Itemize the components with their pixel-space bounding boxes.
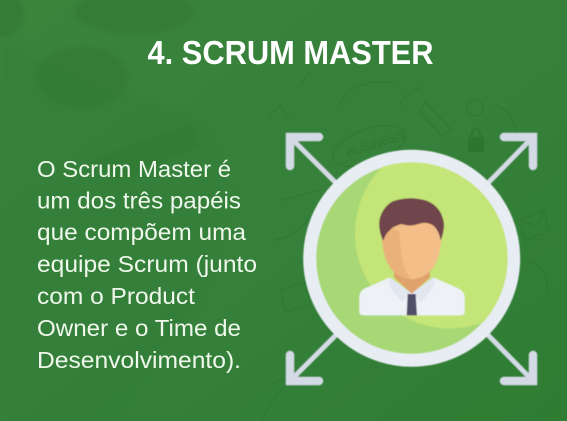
shirt [359, 277, 465, 315]
neck [394, 267, 430, 294]
arrow: top right [488, 137, 533, 183]
text block: Scrum Master description: Desenvolvimento). [37, 347, 241, 373]
text block: Scrum Master description: um dos três papéis [37, 188, 241, 214]
arrow: top left [290, 137, 336, 183]
text block: Scrum Master description: Owner e o Time de [37, 315, 241, 341]
icon: padlock doodle [468, 128, 484, 152]
tie [407, 294, 417, 315]
circle highlight [354, 162, 508, 328]
background: faded business doodles: BUSINESS [345, 128, 407, 160]
icon: four outward arrows [290, 137, 533, 381]
title: 4. SCRUM MASTER [148, 34, 434, 71]
text block: Scrum Master description: equipe Scrum (junto [37, 251, 257, 277]
person [359, 198, 465, 315]
text block: Scrum Master description: O Scrum Master é [37, 156, 231, 182]
face shade [382, 227, 412, 279]
background: faded business doodles [262, 72, 548, 420]
text block: Scrum Master description: que compõem uma [37, 219, 247, 245]
arrow: bottom left [290, 335, 336, 381]
face [382, 217, 441, 279]
arrow: bottom right [488, 335, 533, 381]
background: faded hand and leaf shapes [0, 0, 230, 421]
hair [379, 198, 444, 241]
circle ring [310, 156, 514, 360]
text block: Scrum Master description [37, 156, 257, 373]
icon: person in circle [310, 138, 545, 360]
text block: Scrum Master description: com o Product [37, 283, 195, 309]
collar [389, 277, 435, 302]
